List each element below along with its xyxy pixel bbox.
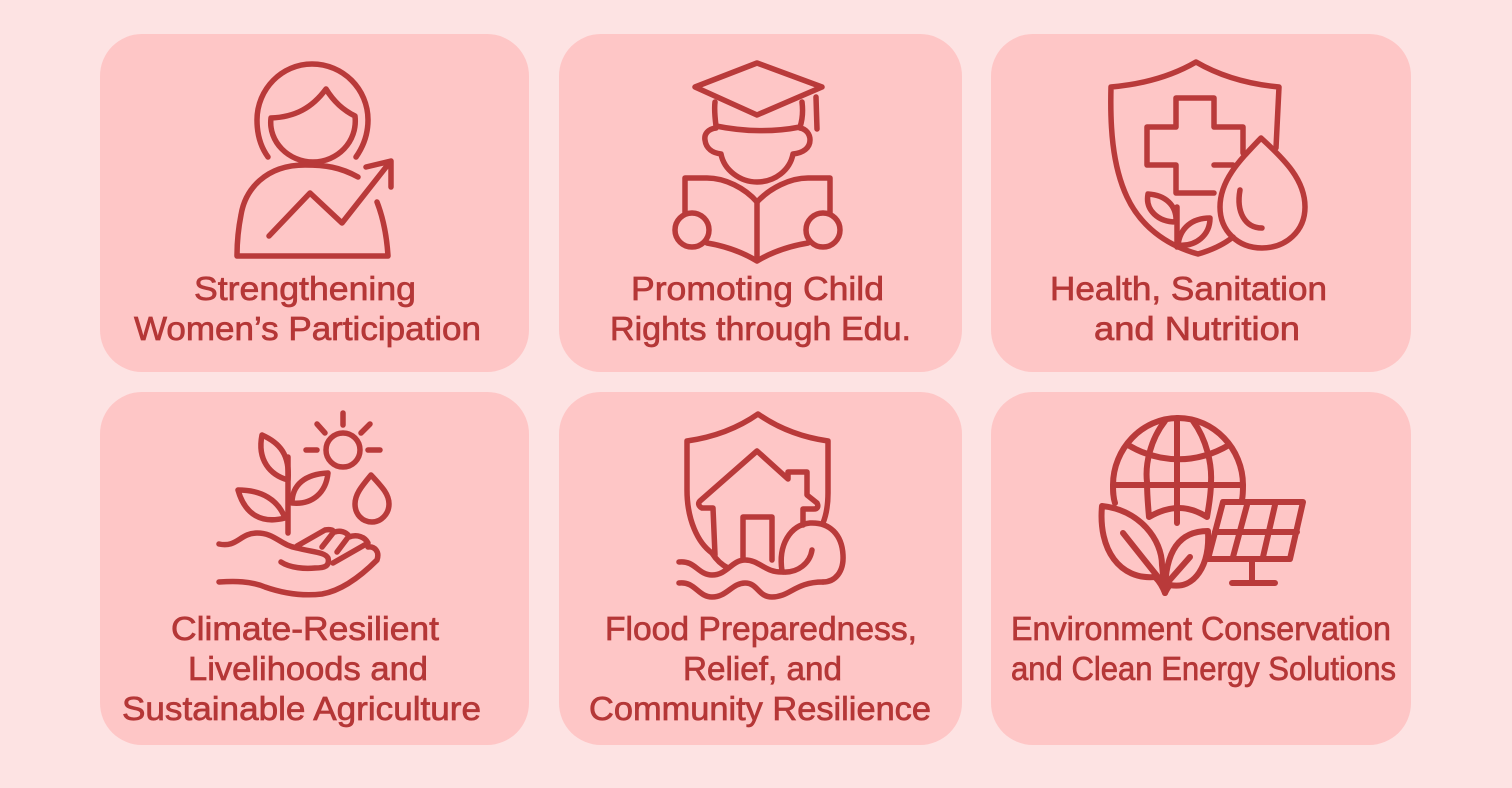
label: flood preparedness — [589, 610, 931, 727]
label: health: Health, Sanitation — [1050, 270, 1327, 307]
panel: health, sanitation and nutrition — [991, 34, 1411, 372]
label: climate-resilient livelihoods — [122, 610, 481, 727]
label: environment and clean energy: Environment Conservation — [1011, 610, 1391, 647]
panel: environment and clean energy — [991, 392, 1411, 745]
label: flood preparedness: Relief, and — [683, 650, 842, 687]
icon: woman with rising arrow — [237, 64, 391, 256]
label: health — [1050, 270, 1327, 347]
label: flood preparedness: Community Resilience — [589, 690, 931, 727]
label: women's participation: Women’s Participation — [134, 310, 481, 347]
label: health: and Nutrition — [1094, 310, 1300, 347]
icon: shield with cross, drop and leaves — [1111, 62, 1305, 254]
label: child rights: Rights through Edu. — [610, 310, 911, 347]
label: climate-resilient livelihoods: Sustainable Agriculture — [122, 690, 481, 727]
label: women's participation: Strengthening — [194, 270, 416, 307]
label: climate-resilient livelihoods: Livelihoods and — [188, 650, 428, 687]
icon: hand with plant, sun and drop — [219, 413, 389, 595]
icon: shield, house and flood waves — [679, 414, 843, 597]
icon: globe, leaves and solar panel — [1102, 418, 1303, 593]
label: environment and clean energy — [1011, 610, 1396, 687]
label: child rights: Promoting Child — [631, 270, 884, 307]
label: women's participation — [134, 270, 481, 347]
panel: climate-resilient livelihoods — [100, 392, 529, 745]
panel: child rights through education — [559, 34, 962, 372]
icon: graduate reading a book — [675, 63, 840, 261]
label: flood preparedness: Flood Preparedness, — [605, 610, 917, 647]
label: child rights — [610, 270, 911, 347]
panel: women's participation — [100, 34, 529, 372]
panel: flood preparedness — [559, 392, 962, 745]
label: climate-resilient livelihoods: Climate-Resilient — [171, 610, 439, 647]
label: environment and clean energy: and Clean Energy Solutions — [1011, 650, 1396, 687]
